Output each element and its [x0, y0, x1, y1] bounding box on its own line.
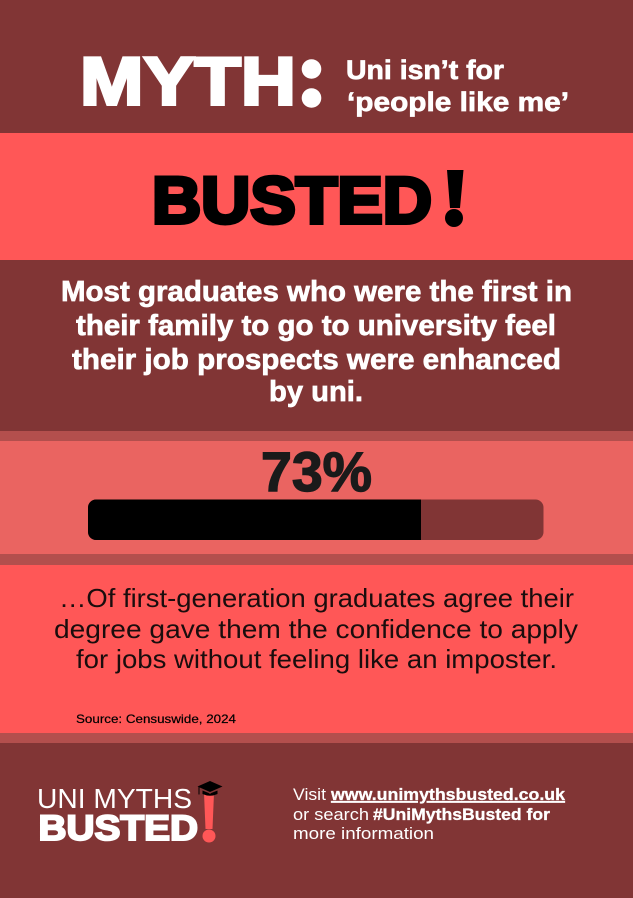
claim text — [61, 276, 572, 408]
claim text: their family to go to university feel — [76, 310, 556, 342]
myth statement: ‘people like me’ — [347, 87, 569, 117]
claim text: Most graduates who were the first in — [61, 276, 572, 308]
call to action — [293, 785, 566, 843]
explanation text — [54, 583, 578, 674]
logo: UNI MYTHS — [37, 783, 192, 814]
call to action: or search — [293, 805, 369, 824]
panel: explanation — [0, 565, 633, 733]
call to action: Visit — [293, 785, 326, 804]
statistic: 73%: 73% — [261, 440, 372, 503]
heading: BUSTED: BUSTED — [152, 163, 432, 237]
source: Source: Censuswide, 2024 — [76, 712, 236, 726]
logo: BUSTED — [38, 809, 198, 848]
panel: statistic — [0, 431, 633, 565]
icon: logo exclamation — [202, 793, 216, 842]
heading: MYTH: MYTH — [80, 44, 296, 120]
claim text: their job prospects were enhanced — [72, 344, 561, 376]
panel: footer — [0, 733, 633, 898]
exclamation mark — [445, 170, 464, 227]
panel: main claim — [0, 260, 633, 431]
heading: MYTH: : — [298, 32, 325, 121]
heading: MYTH — [80, 32, 325, 121]
myth statement — [346, 55, 569, 117]
explanation text: degree gave them the confidence to apply — [54, 614, 578, 644]
logo — [37, 781, 222, 848]
panel: myth header — [0, 0, 633, 133]
call to action: www.unimythsbusted.co.uk — [330, 785, 566, 804]
call to action: #UniMythsBusted for — [373, 805, 550, 824]
myth statement: Uni isn’t for — [346, 55, 505, 85]
call to action: more information — [293, 824, 434, 843]
panel: busted banner — [0, 133, 633, 260]
explanation text: for jobs without feeling like an imposter. — [76, 644, 557, 674]
explanation text: …Of first-generation graduates agree their — [59, 583, 574, 613]
progress bar — [88, 500, 544, 540]
claim text: by uni. — [269, 376, 363, 408]
icon: graduation cap — [198, 781, 222, 796]
